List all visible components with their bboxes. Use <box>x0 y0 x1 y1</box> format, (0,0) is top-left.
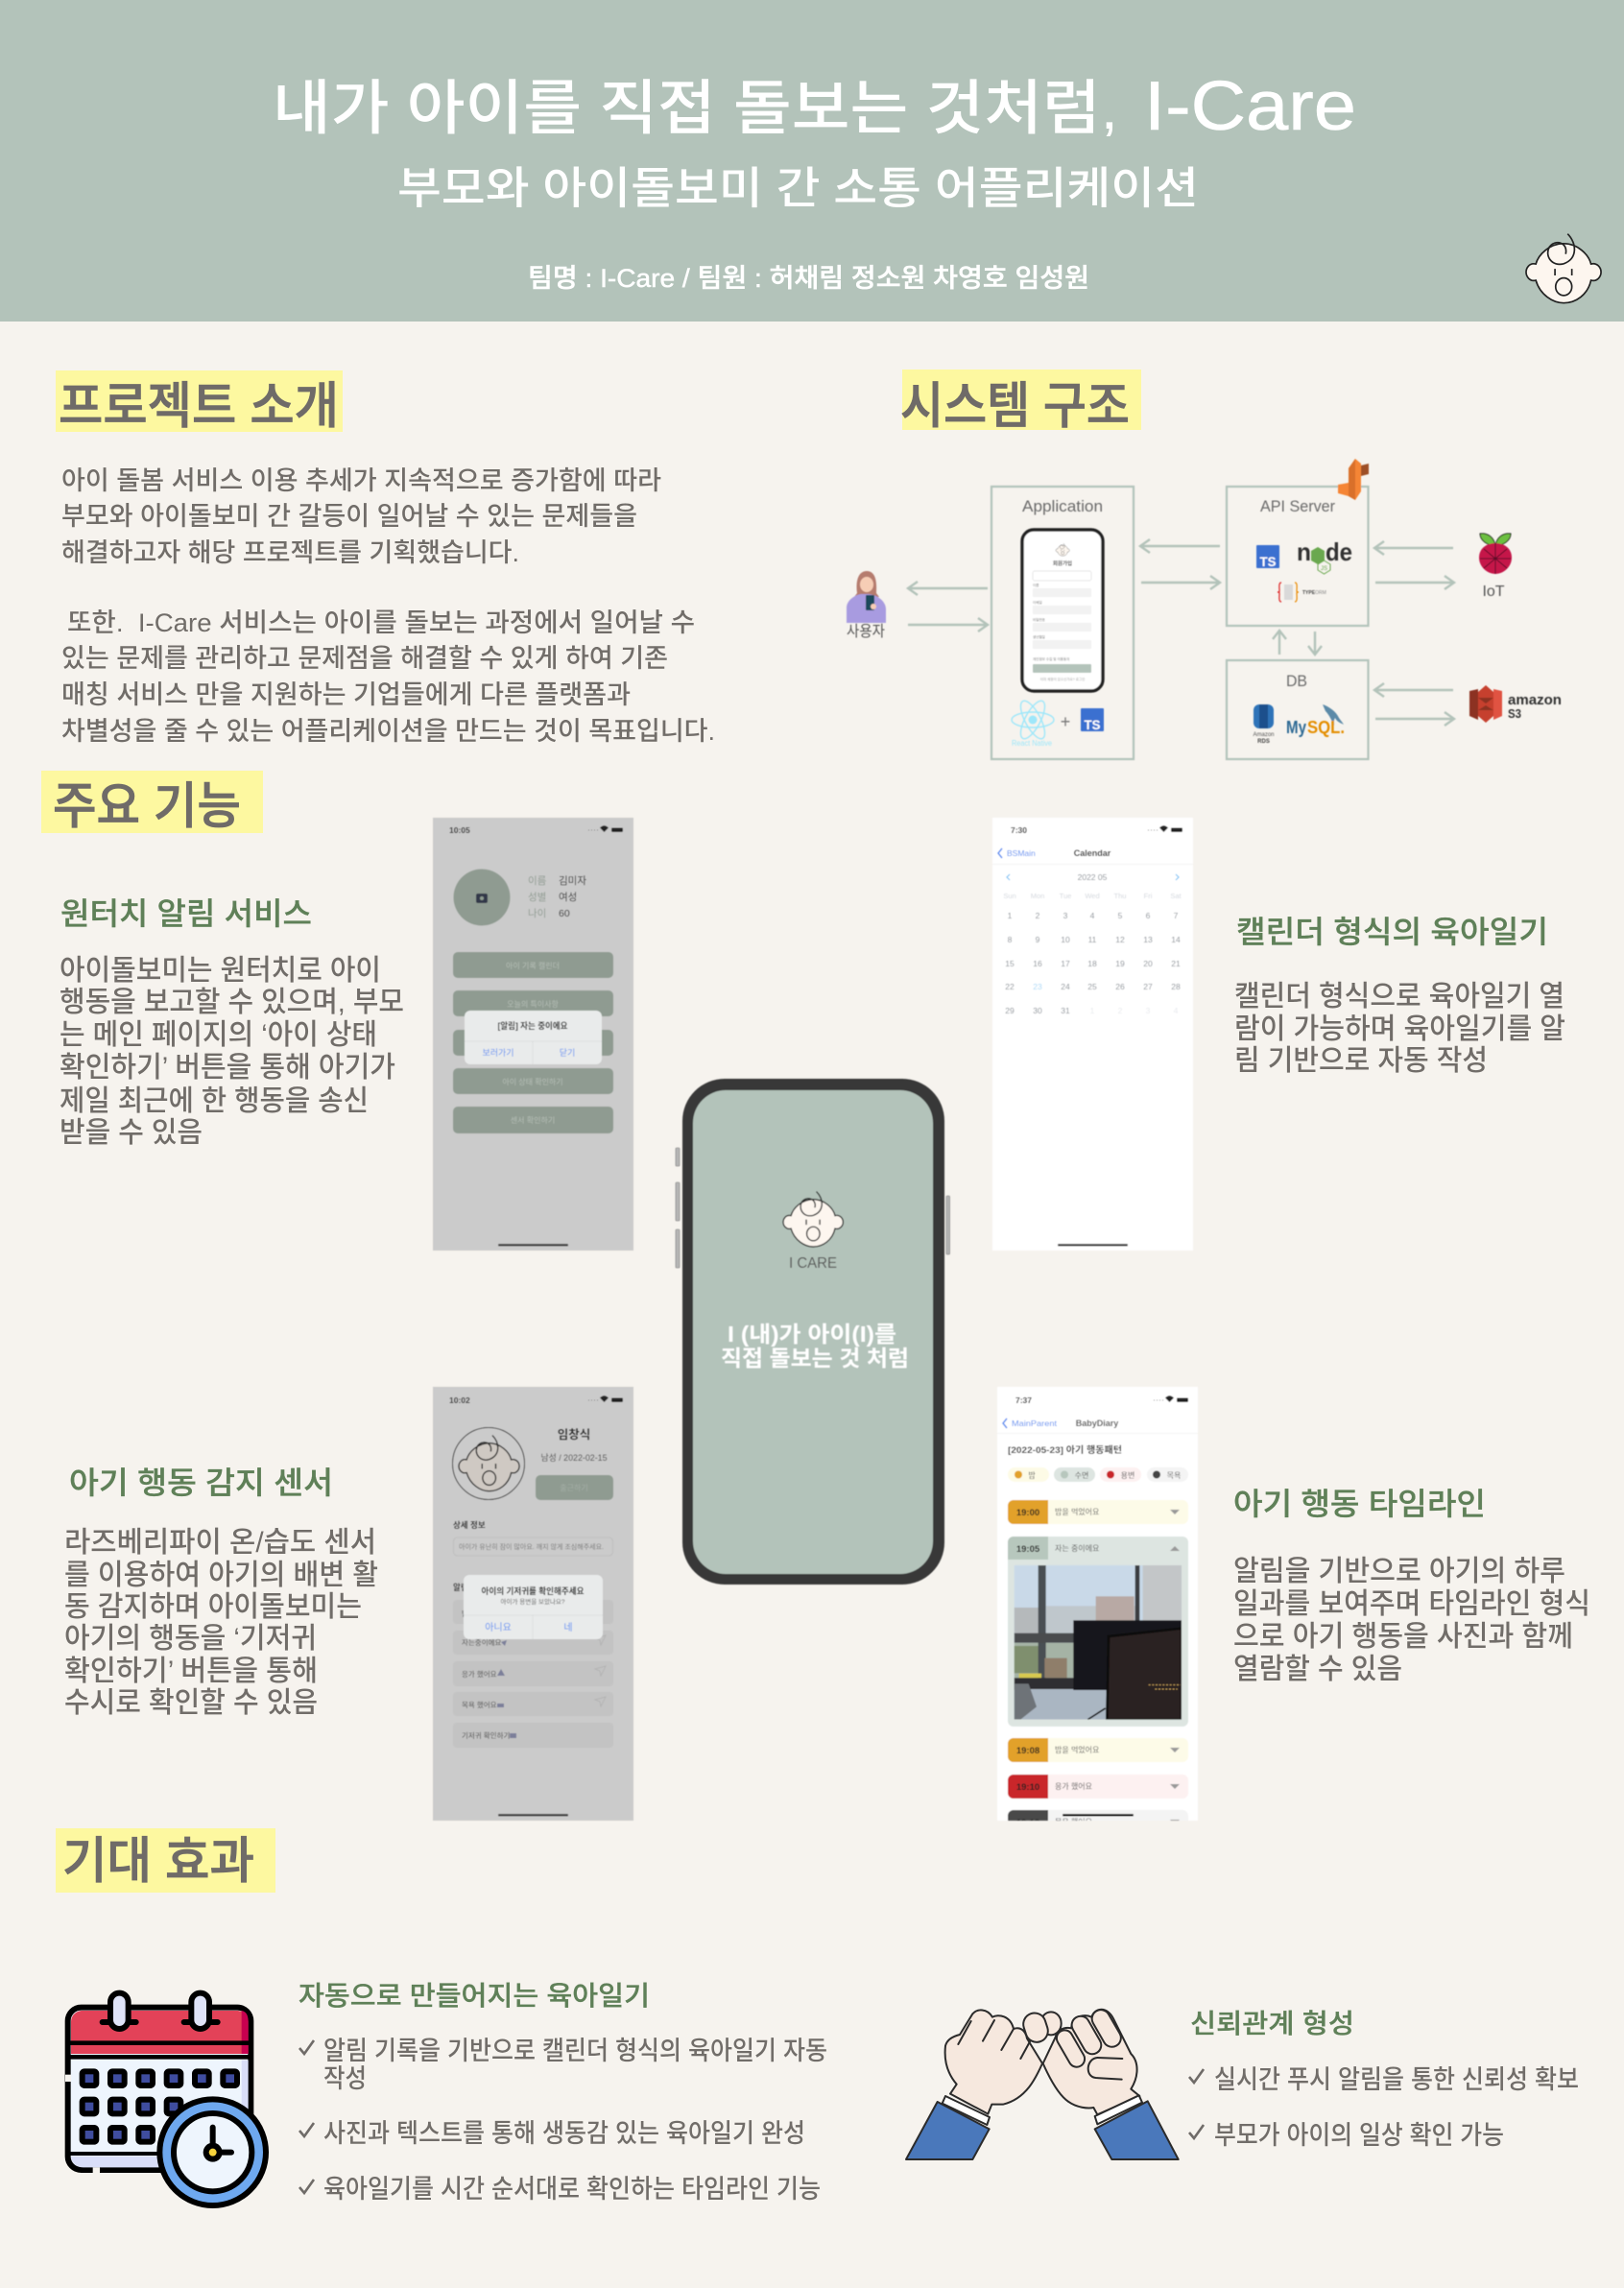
feature text: calendar diary: 람이 가능하며 육아일기를 알 <box>1234 1013 1565 1045</box>
subtitle: 부모와 아이돌보미 간 소통 어플리케이션 <box>397 163 1199 213</box>
screenshot: calendar <box>992 818 1193 1251</box>
icon: nodejs: n <box>1297 537 1311 566</box>
menu buttons: 센서 확인하기 <box>511 1115 555 1125</box>
feature text: one-touch alert: 는 메인 페이지의 ‘아이 상태 <box>60 1019 377 1051</box>
timeline row 19:05 with photo: 19:05 <box>1016 1544 1040 1555</box>
calendar grid: 10 <box>1061 935 1070 944</box>
icon: mysql: SQL. <box>1307 718 1345 737</box>
timeline row 19:12: 19:12 <box>1016 1818 1039 1828</box>
text block: auto diary <box>299 1981 827 2204</box>
calendar grid: 22 <box>1005 982 1015 991</box>
application label: Application <box>1022 497 1103 515</box>
feature text: timeline: 알림을 기반으로 아기의 하루 <box>1233 1556 1565 1587</box>
timeline row 19:05 with photo <box>1008 1537 1188 1727</box>
feature text: timeline: 으로 아기 행동을 사진과 함께 <box>1233 1621 1573 1653</box>
menu buttons: 아이 기록 캘린더 <box>506 961 560 970</box>
feature text: sensor <box>64 1466 378 1719</box>
tagline <box>721 1322 909 1370</box>
child info <box>541 1427 607 1463</box>
screenshot: one-touch alert main page <box>433 818 633 1251</box>
timeline row 19:08: 19:08 <box>1016 1746 1039 1756</box>
profile photo <box>453 1428 524 1499</box>
legend chips: 수면 <box>1075 1470 1088 1480</box>
calendar grid: 3 <box>1146 1006 1151 1015</box>
icon: typescript: TS <box>1259 554 1277 569</box>
phone side buttons <box>676 1148 950 1268</box>
icon: typescript: TS <box>1085 717 1100 732</box>
alert dialog: 아이의 기저귀를 확인해주세요 <box>482 1585 584 1596</box>
heading: system architecture: 시스템 구조 <box>900 379 1130 435</box>
alert dialog: 아이가 용변을 보았나요? <box>500 1597 565 1606</box>
calendar grid: 2 <box>1036 911 1040 920</box>
feature text: calendar diary <box>1234 915 1565 1077</box>
timeline row 19:10: 응가 했어요 <box>1055 1781 1092 1791</box>
profile info <box>528 875 586 919</box>
mini phone signup screen: 생년월일 <box>1033 634 1045 639</box>
feature text: one-touch alert: 확인하기’ 버튼을 통해 아기가 <box>60 1052 395 1084</box>
profile info: 성별 <box>528 892 546 903</box>
feature text: one-touch alert: 받을 수 있음 <box>60 1117 203 1149</box>
mini phone signup screen: 회원가입 <box>1053 560 1072 567</box>
alert dialog <box>465 1011 602 1064</box>
icon: baby logo <box>783 1192 843 1247</box>
check-in button: 출근하기 <box>560 1483 588 1492</box>
text block: trust: 신뢰관계 형성 <box>1190 2009 1354 2038</box>
icon: mysql <box>1286 704 1345 737</box>
plus sign: + <box>1061 712 1070 731</box>
timeline row 19:08: 밥을 먹었어요 <box>1055 1745 1099 1754</box>
calendar grid: 3 <box>1063 911 1068 920</box>
calendar grid: 18 <box>1087 959 1097 968</box>
calendar grid: 4 <box>1090 911 1095 920</box>
nav bar: MainParent <box>1012 1418 1058 1428</box>
legend chips: 용변 <box>1121 1470 1134 1480</box>
profile info: 나이 <box>528 908 546 919</box>
text block: project intro: 매칭 서비스 만을 지원하는 기업들에게 다른 플랫폼과 <box>61 680 631 709</box>
icon: baby logo <box>1526 234 1601 303</box>
calendar grid: 15 <box>1005 959 1015 968</box>
DB label: DB <box>1286 672 1307 690</box>
icon: amazon RDS: RDS <box>1257 739 1270 745</box>
feature text: sensor: 아기의 행동을 ‘기저귀 <box>64 1623 317 1655</box>
feature text: one-touch alert: 원터치 알림 서비스 <box>60 896 312 931</box>
calendar grid: 30 <box>1033 1006 1042 1015</box>
heading: key features: 주요 기능 <box>53 779 241 835</box>
icon: nodejs: de <box>1325 537 1352 566</box>
timeline row 19:12 <box>1007 1809 1188 1822</box>
feature text: sensor: 아기 행동 감지 센서 <box>69 1466 333 1500</box>
feature text: calendar diary: 림 기반으로 자동 작성 <box>1234 1045 1488 1077</box>
feature text: sensor: 수시로 확인할 수 있음 <box>64 1687 318 1719</box>
calendar grid: 19 <box>1115 959 1125 968</box>
child info: 임창식 <box>558 1427 590 1442</box>
profile photo <box>453 870 511 925</box>
icon: amazon S3 <box>1469 685 1562 723</box>
feature text: one-touch alert: 아이돌보미는 원터치로 아이 <box>60 955 381 987</box>
alert dialog: 네 <box>563 1622 573 1633</box>
arrows: API and DB <box>1273 631 1322 655</box>
icon: pinky promise hands <box>906 2007 1179 2159</box>
alert list: 알림 보내기 <box>453 1583 492 1592</box>
icon: react native <box>1012 698 1054 748</box>
mini phone signup screen: 개인정보 수집 및 이용동의 <box>1033 656 1069 661</box>
panel: API server <box>1227 459 1369 626</box>
calendar grid: Wed <box>1085 892 1100 900</box>
IoT label: IoT <box>1482 584 1505 600</box>
icon: typeorm <box>1278 583 1326 602</box>
tagline: 직접 돌보는 것 처럼 <box>721 1346 909 1370</box>
text block: project intro: 있는 문제를 관리하고 문제점을 해결할 수 있게 하여 기존 <box>61 644 668 673</box>
text block: project intro: 차별성을 줄 수 있는 어플리케이션을 만드는 것이 목표입니다. <box>61 717 715 746</box>
alert list <box>453 1583 613 1748</box>
status bar <box>449 1395 623 1405</box>
alert list: 자는중이에요 <box>462 1637 501 1647</box>
menu buttons: 아이 상태 확인하기 <box>502 1077 563 1086</box>
legend chips <box>1008 1467 1188 1482</box>
calendar grid: 13 <box>1143 935 1153 944</box>
menu buttons <box>453 952 613 1133</box>
check list <box>1189 2065 1579 2150</box>
home indicator <box>498 1244 568 1246</box>
text block: project intro: 부모와 아이돌보미 간 갈등이 일어날 수 있는 문제들을 <box>61 502 637 531</box>
icon: amazon S3: S3 <box>1508 706 1521 721</box>
calendar grid: 2 <box>1118 1006 1123 1015</box>
arrows: API and IoT <box>1374 541 1454 589</box>
child info: 남성 / 2022-02-15 <box>541 1453 607 1463</box>
screenshot: timeline <box>997 1387 1198 1834</box>
text block: auto diary: 자동으로 만들어지는 육아일기 <box>299 1981 650 2011</box>
feature text: one-touch alert <box>60 896 404 1149</box>
calendar grid: Fri <box>1144 892 1153 900</box>
calendar grid: 6 <box>1146 911 1151 920</box>
feature text: timeline: 열람할 수 있음 <box>1233 1654 1402 1685</box>
calendar grid: 31 <box>1061 1006 1070 1015</box>
timeline row 19:10 <box>1008 1775 1188 1799</box>
text block: project intro <box>61 466 715 746</box>
alert list: 응가 했어요 <box>462 1669 497 1679</box>
mini phone signup screen: 이름 <box>1033 583 1039 587</box>
calendar grid: 17 <box>1061 959 1070 968</box>
icon: typescript <box>1256 545 1279 569</box>
alert dialog <box>464 1575 603 1639</box>
profile info: 이름 <box>528 875 547 887</box>
icon: typeorm: TYPEORM <box>1302 590 1326 596</box>
feature text: timeline <box>1233 1487 1590 1685</box>
status bar: 10:02 <box>449 1395 470 1405</box>
menu buttons: 오늘의 특이사항 <box>507 999 560 1009</box>
calendar grid: 2022 05 <box>1078 872 1108 882</box>
arrows: user and application <box>908 582 988 632</box>
arrows: application and API <box>1140 539 1220 589</box>
status bar: 7:30 <box>1011 825 1027 835</box>
calendar grid: 29 <box>1005 1006 1015 1015</box>
logo text: I CARE <box>789 1255 837 1272</box>
feature text: sensor: 라즈베리파이 온/습도 센서 <box>64 1527 376 1559</box>
center phone <box>676 1079 950 1585</box>
timeline row 19:08 <box>1008 1738 1188 1762</box>
check list: 작성 <box>323 2064 367 2093</box>
tagline: I (내)가 아이(I)를 <box>728 1322 896 1347</box>
check list: 육아일기를 시간 순서대로 확인하는 타임라인 기능 <box>323 2175 821 2204</box>
header banner <box>0 0 1624 322</box>
panel: application <box>991 487 1134 759</box>
phone screen <box>693 1090 933 1574</box>
phone body <box>682 1079 944 1585</box>
icon: amazon S3: amazon <box>1508 692 1562 708</box>
nav bar <box>997 1418 1198 1434</box>
nav bar: BSMain <box>1007 848 1036 858</box>
icon: user <box>847 571 886 623</box>
icon: amazon RDS: Amazon <box>1253 732 1275 738</box>
icon: react native: React Native <box>1012 739 1053 748</box>
title <box>273 68 1356 145</box>
check list <box>299 2037 827 2204</box>
feature text: sensor: 동 감지하며 아이돌보미는 <box>64 1591 362 1623</box>
check list: 알림 기록을 기반으로 캘린더 형식의 육아일기 자동 <box>323 2037 827 2065</box>
details field: 아이가 유난히 잠이 많아요. 깨지 않게 조심해주세요. <box>459 1542 604 1551</box>
icon: amazon RDS <box>1253 704 1275 745</box>
check list: 실시간 푸시 알림을 통한 신뢰성 확보 <box>1214 2065 1579 2094</box>
calendar grid: 24 <box>1061 982 1070 991</box>
heading: expected effects: 기대 효과 <box>62 1834 254 1890</box>
profile info: 여성 <box>559 892 577 903</box>
calendar grid: 14 <box>1171 935 1181 944</box>
profile info: 김미자 <box>559 875 586 887</box>
calendar grid: 9 <box>1036 935 1040 944</box>
calendar grid: 23 <box>1033 982 1042 991</box>
feature text: one-touch alert: 제일 최근에 한 행동을 송신 <box>60 1085 369 1117</box>
alert dialog: 아니요 <box>485 1622 512 1633</box>
mini phone signup screen: 이메일 <box>1033 600 1042 605</box>
calendar grid: 7 <box>1174 911 1179 920</box>
timeline row 19:05 with photo: 자는 중이에요 <box>1055 1543 1099 1553</box>
legend chips: 밥 <box>1028 1471 1036 1480</box>
timeline row 19:10: 19:10 <box>1016 1782 1039 1793</box>
status bar <box>449 825 623 835</box>
calendar grid: Mon <box>1031 892 1044 900</box>
icon: nodejs: JS <box>1321 566 1327 572</box>
calendar grid: 11 <box>1088 935 1097 944</box>
profile info: 60 <box>559 908 570 919</box>
calendar grid <box>1003 872 1182 1015</box>
date heading: [2022-05-23] 아기 행동패턴 <box>1008 1444 1122 1456</box>
calendar grid: 28 <box>1171 982 1181 991</box>
calendar grid: 8 <box>1008 935 1013 944</box>
icon: nodejs <box>1297 537 1352 574</box>
feature text: timeline: 일과를 보여주며 타임라인 형식 <box>1233 1588 1590 1620</box>
calendar grid: 26 <box>1115 982 1125 991</box>
timeline row 19:00: 19:00 <box>1016 1508 1039 1518</box>
check list: 사진과 텍스트를 통해 생동감 있는 육아일기 완성 <box>323 2119 805 2148</box>
calendar grid: 25 <box>1087 982 1097 991</box>
screenshot: sitter page <box>433 1387 633 1821</box>
home indicator <box>1063 1814 1134 1816</box>
arrows: DB and S3 <box>1374 683 1454 726</box>
icon: EC2 <box>1338 459 1369 500</box>
details field <box>453 1520 612 1556</box>
calendar grid: 1 <box>1090 1006 1095 1015</box>
system architecture diagram <box>847 459 1562 759</box>
calendar grid: 5 <box>1118 911 1123 920</box>
text block: project intro: 또한. I-Care 서비스는 아이를 돌보는 과정에서 일어날 수 <box>67 608 695 637</box>
feature text: sensor: 를 이용하여 아기의 배변 활 <box>64 1560 378 1591</box>
API label: API Server <box>1260 497 1335 515</box>
user label: 사용자 <box>847 623 885 640</box>
alert list: 목욕 했어요 <box>462 1700 497 1709</box>
calendar grid: Sat <box>1170 892 1182 900</box>
feature text: calendar diary: 캘린더 형식의 육아일기 <box>1236 915 1548 949</box>
mini phone signup screen: 이미 계정이 있으신가요? 로그인 <box>1040 677 1085 681</box>
timeline row 19:12: 목욕 했어요 <box>1055 1817 1092 1826</box>
alert dialog: 닫기 <box>560 1047 575 1058</box>
check-in button <box>536 1475 613 1500</box>
home indicator <box>498 1814 568 1816</box>
text block: project intro: 아이 돌봄 서비스 이용 추세가 지속적으로 증가함에 따라 <box>61 466 661 495</box>
icon: typescript <box>1081 708 1104 732</box>
feature text: one-touch alert: 행동을 보고할 수 있으며, 부모 <box>60 987 404 1018</box>
details field: 상세 정보 <box>453 1520 486 1530</box>
status bar <box>1011 825 1182 835</box>
nav bar <box>992 848 1193 864</box>
nav bar: Calendar <box>1074 848 1111 858</box>
icon: calendar with clock <box>65 1993 266 2205</box>
status bar: 10:05 <box>449 825 470 835</box>
text block: trust <box>1189 2009 1579 2150</box>
team line: 팀명 : I-Care / 팀원 : 허채림 정소원 차영호 임성원 <box>528 264 1089 293</box>
nav bar: BabyDiary <box>1076 1418 1118 1428</box>
mini phone signup screen: 비밀번호 <box>1033 617 1046 622</box>
title: I-Care <box>1144 68 1356 145</box>
calendar grid: 20 <box>1143 959 1153 968</box>
status bar <box>1015 1395 1188 1405</box>
status bar: 7:37 <box>1015 1395 1032 1405</box>
timeline row 19:00: 밥을 먹었어요 <box>1055 1507 1099 1516</box>
title: 내가 아이를 직접 돌보는 것처럼, <box>273 76 1118 142</box>
calendar grid: 21 <box>1171 959 1181 968</box>
calendar grid: 4 <box>1174 1006 1179 1015</box>
alert list: 기저귀 확인하기 <box>462 1730 510 1740</box>
calendar grid: 1 <box>1008 911 1013 920</box>
check list: 부모가 아이의 일상 확인 가능 <box>1214 2121 1504 2150</box>
alert dialog: 보러가기 <box>482 1048 514 1058</box>
calendar grid: Tue <box>1060 892 1071 900</box>
icon: raspberry pi <box>1479 534 1512 574</box>
calendar grid: 27 <box>1143 982 1153 991</box>
text block: project intro: 해결하고자 해당 프로젝트를 기획했습니다. <box>61 538 519 567</box>
mini phone signup screen <box>1022 530 1103 691</box>
icon: mysql: My <box>1286 718 1306 737</box>
feature text: calendar diary: 캘린더 형식으로 육아일기 열 <box>1234 981 1564 1013</box>
calendar grid: 16 <box>1033 959 1042 968</box>
legend chips: 목욕 <box>1167 1471 1181 1480</box>
calendar grid: 12 <box>1115 935 1125 944</box>
panel: DB <box>1227 660 1369 759</box>
photo: office window and monitors <box>1015 1565 1182 1720</box>
heading: project intro: 프로젝트 소개 <box>59 379 339 435</box>
alert dialog: [알림] 자는 중이에요 <box>497 1020 568 1031</box>
feature text: sensor: 확인하기’ 버튼을 통해 <box>64 1656 318 1687</box>
feature text: timeline: 아기 행동 타임라인 <box>1233 1487 1486 1521</box>
timeline row 19:00 <box>1008 1500 1188 1524</box>
calendar grid: Sun <box>1003 892 1016 900</box>
alert list: 밥을 먹었어요 <box>462 1609 504 1618</box>
calendar grid: Thu <box>1114 892 1126 900</box>
home indicator <box>1058 1244 1128 1246</box>
